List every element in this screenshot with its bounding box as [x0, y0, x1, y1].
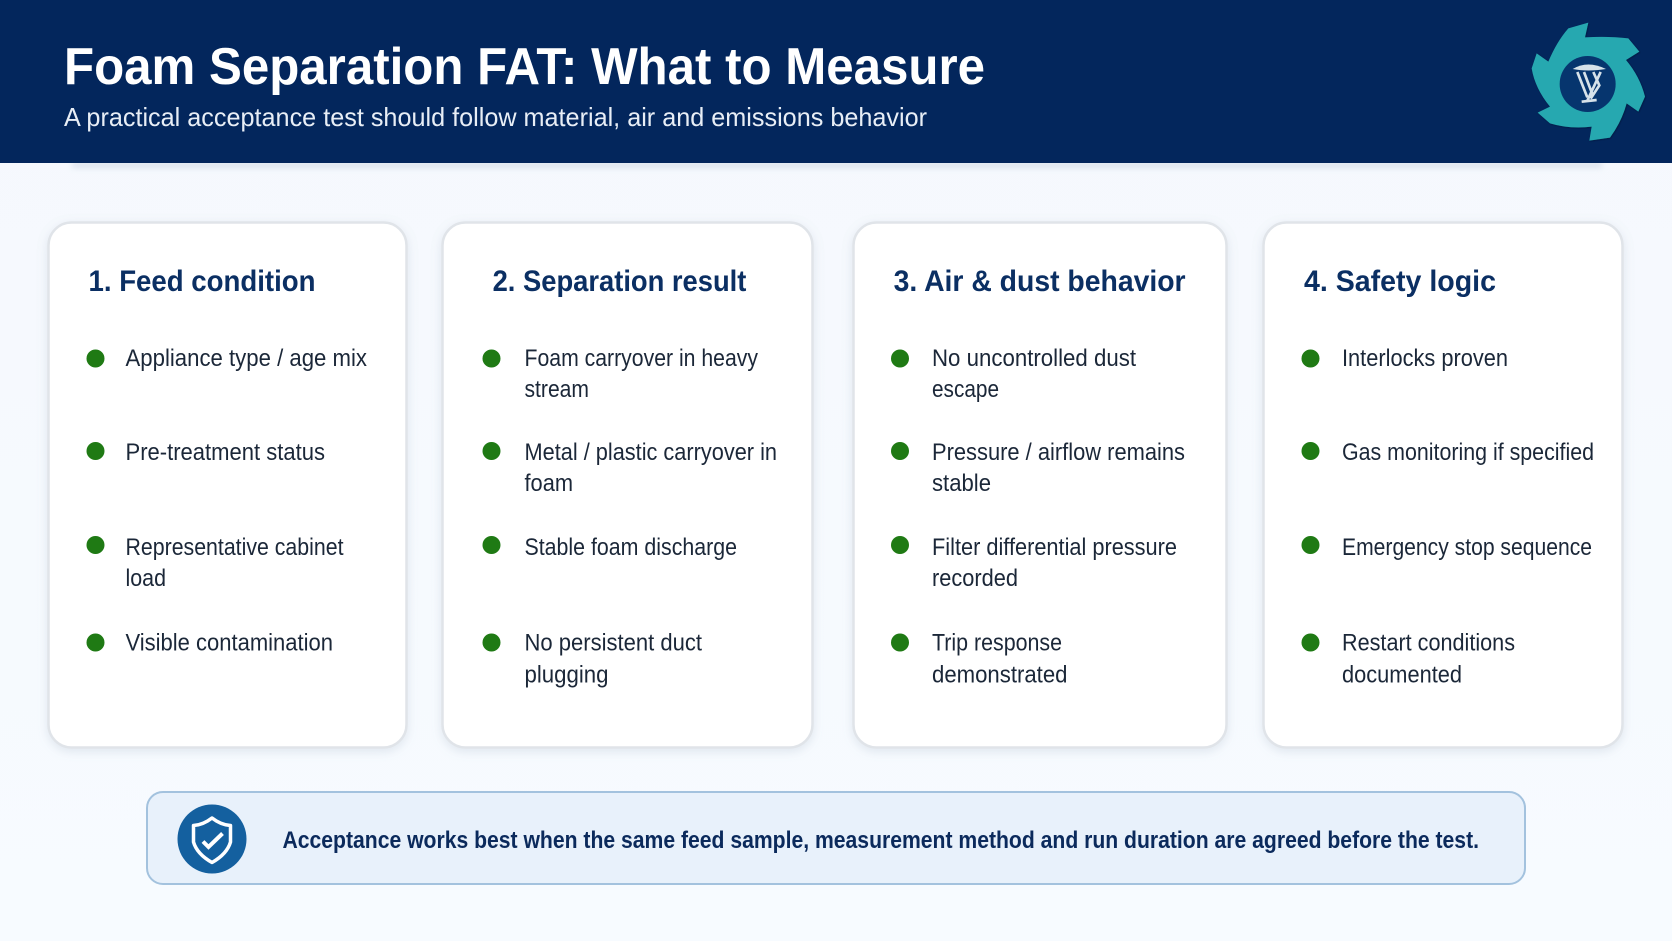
bullet item: Interlocks proven: Interlocks proven	[1342, 345, 1508, 372]
bullet item: Gas monitoring: Gas monitoring if specified	[1342, 439, 1594, 466]
bullet item: Pre-treatment status: Pre-treatment status	[126, 439, 325, 466]
icon: teal gear logo	[1532, 23, 1645, 141]
bullet item: Representative cabinet load: Representative cabinet	[126, 534, 344, 561]
bullet item: Foam carryover: stream	[524, 376, 589, 403]
bullet item: No persistent duct plugging: plugging	[524, 662, 608, 688]
heading: Separation result: 2. Separation result	[493, 265, 746, 298]
bullet item: Representative cabinet load: load	[126, 565, 166, 592]
bullet item: Metal / plastic carryover: foam	[524, 470, 573, 497]
bullet item: No uncontrolled dust escape: No uncontrolled dust	[932, 345, 1136, 372]
bullet item: Appliance type: Appliance type / age mix	[126, 345, 367, 372]
bullet item: Foam carryover	[482, 345, 758, 403]
bullet item: Trip response: Trip response	[932, 630, 1062, 656]
bullet item: Restart conditions: Restart conditions	[1342, 630, 1515, 656]
bullet item: No persistent duct plugging: No persistent duct	[524, 630, 702, 656]
bullet item: No persistent duct plugging	[482, 630, 702, 688]
panel: 3. Air & dust behavior	[854, 222, 1226, 748]
callout text: Acceptance works best when the same feed sample, measurement method and run duration are agreed before the test.	[282, 827, 1479, 854]
bullet item: Filter differential pressure	[891, 534, 1177, 592]
bullet item: Representative cabinet load	[86, 534, 344, 592]
panel: 4. Safety logic	[1264, 222, 1622, 748]
heading: Safety logic: 4. Safety logic	[1304, 265, 1496, 298]
panel: 1. Feed condition	[48, 222, 406, 748]
bullet item: Metal / plastic carryover: Metal / plastic carryover in	[524, 439, 777, 466]
bullet item: Restart conditions: documented	[1342, 662, 1462, 688]
bullet item: Trip response: demonstrated	[932, 662, 1068, 688]
heading: Feed condition: 1. Feed condition	[88, 265, 316, 298]
icon: shield with check	[178, 804, 246, 874]
bullet item: Pressure / airflow stable: Pressure / airflow remains	[932, 439, 1185, 466]
panel: 2. Separation result	[442, 222, 812, 748]
bullet item: Metal / plastic carryover	[482, 439, 777, 497]
bullet item: Emergency stop sequence: Emergency stop sequence	[1342, 534, 1592, 561]
header shadow strip	[72, 162, 1602, 168]
bullet item: Filter differential pressure: Filter differential pressure	[932, 534, 1177, 561]
bullet item: Trip response	[891, 630, 1068, 688]
bullet item: Visible contamination: Visible contamination	[126, 630, 333, 656]
bullet item: Restart conditions	[1302, 630, 1515, 688]
bullet item: Pressure / airflow stable	[891, 439, 1185, 497]
heading: Air & dust behavior: 3. Air & dust behavior	[894, 265, 1186, 298]
bullet item: Pressure / airflow stable: stable	[932, 470, 991, 497]
bullet item: Filter differential pressure: recorded	[932, 565, 1018, 592]
subtitle: A practical acceptance test should follow material, air and emissions behavior	[64, 102, 927, 132]
bullet item: Foam carryover: Foam carryover in heavy	[524, 345, 758, 372]
title: Foam Separation FAT: What to Measure	[64, 38, 985, 96]
bullet item: No uncontrolled dust escape: escape	[932, 376, 999, 403]
bullet item: No uncontrolled dust escape	[891, 345, 1136, 403]
callout banner	[147, 792, 1525, 884]
bullet item: Stable foam discharge: Stable foam discharge	[524, 534, 737, 561]
header band	[0, 0, 1672, 163]
